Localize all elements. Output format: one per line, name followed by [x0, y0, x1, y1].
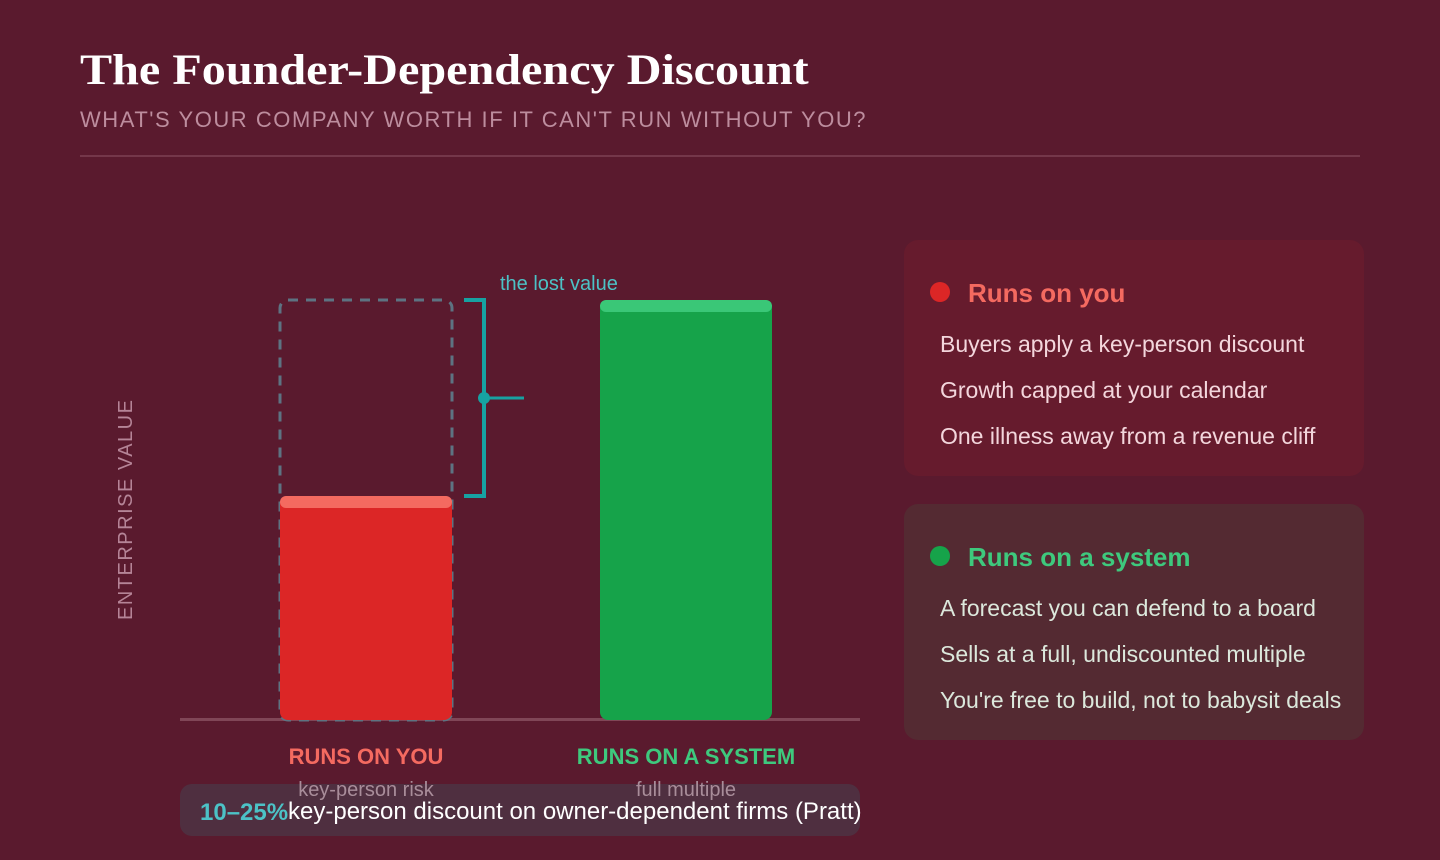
- status dot: red: [930, 282, 950, 302]
- bar sublabel: key-person risk: key-person risk: [298, 779, 435, 801]
- stat strip: [180, 784, 860, 836]
- list item: Buyers apply a key-person discount: [940, 331, 1304, 357]
- bracket: lost value: [464, 300, 524, 496]
- list item: A forecast you can defend to a board: [940, 595, 1316, 621]
- bar label: runs on a system: RUNS ON A SYSTEM: [577, 744, 795, 769]
- panel heading: Runs on you: [968, 278, 1125, 308]
- panel heading: Runs on a system: [968, 542, 1191, 572]
- bar: runs on you: [280, 496, 452, 720]
- callout label: the lost value: the lost value: [500, 273, 618, 295]
- bar label: runs on you: RUNS ON YOU: [289, 744, 443, 769]
- panel: runs on a system: [904, 504, 1364, 740]
- list item: Sells at a full, undiscounted multiple: [940, 641, 1306, 667]
- panel: runs on you: [904, 240, 1364, 476]
- stat description: key-person discount on owner-dependent firms (Pratt): [288, 798, 862, 825]
- stat value: 10–25%: [200, 799, 288, 826]
- list item: One illness away from a revenue cliff: [940, 423, 1315, 449]
- title: The Founder-Dependency Discount: [80, 47, 809, 94]
- ghost bar: lost value outline: [280, 300, 452, 720]
- bar sublabel: full multiple: full multiple: [636, 779, 736, 801]
- list item: Growth capped at your calendar: [940, 377, 1267, 403]
- status dot: green: [930, 546, 950, 566]
- axis label: enterprise value: ENTERPRISE VALUE: [115, 399, 137, 620]
- bar: runs on a system: [600, 300, 772, 720]
- list item: You're free to build, not to babysit deals: [940, 687, 1341, 713]
- subtitle: WHAT'S YOUR COMPANY WORTH IF IT CAN'T RUN WITHOUT YOU?: [80, 107, 867, 132]
